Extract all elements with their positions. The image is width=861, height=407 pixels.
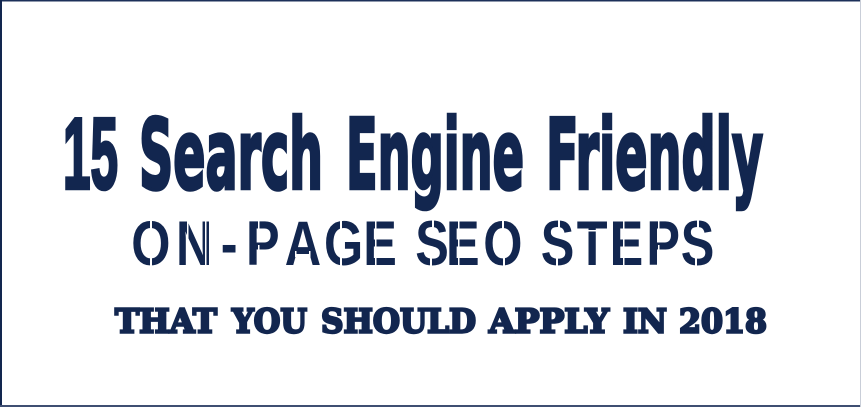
tagline: SHOULD xyxy=(321,302,476,340)
title xyxy=(63,98,763,212)
title: 15 xyxy=(63,98,118,210)
tagline xyxy=(115,302,767,340)
tagline: IN xyxy=(623,302,667,340)
tagline: 2018 xyxy=(679,302,767,340)
tagline: APPLY xyxy=(488,302,609,340)
subtitle: on-page SEO steps: ON-PAGE SEO STEPS xyxy=(131,209,714,279)
tagline: THAT xyxy=(115,302,217,340)
title: Search xyxy=(139,98,323,212)
title: Engine xyxy=(346,98,524,212)
tagline: YOU xyxy=(231,302,307,340)
